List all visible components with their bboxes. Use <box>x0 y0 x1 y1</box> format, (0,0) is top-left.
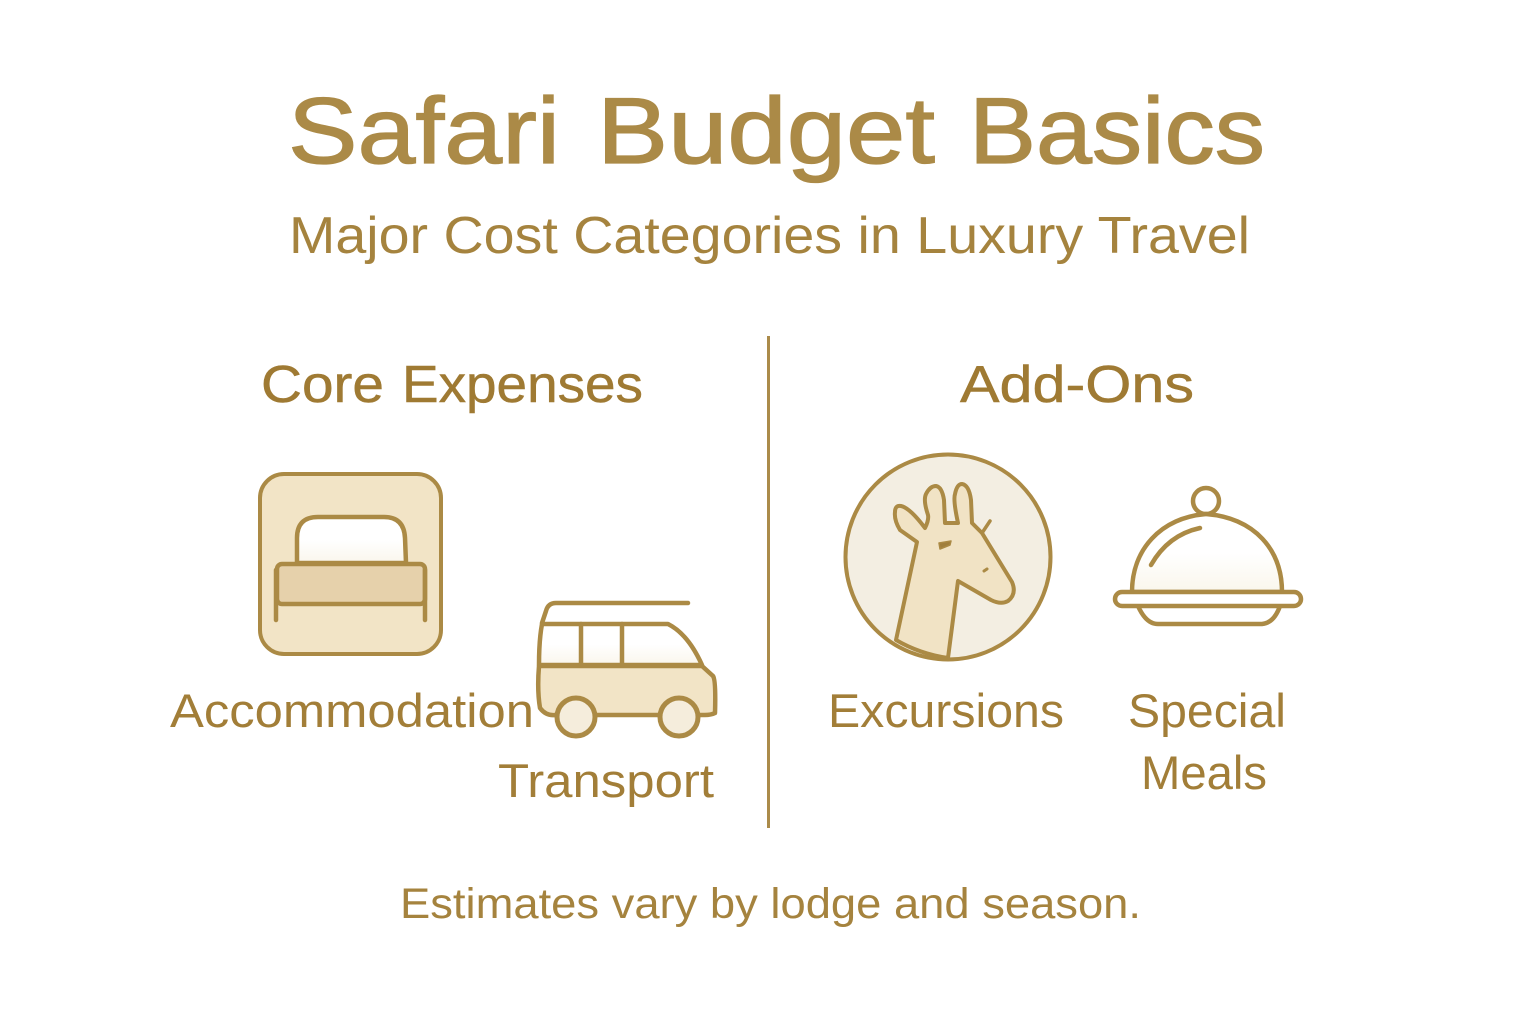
title: Basics <box>969 78 1265 183</box>
label: special meals: Special <box>1128 684 1286 737</box>
giraffe eye <box>939 541 951 549</box>
label: special meals: Meals <box>1141 746 1267 799</box>
icon: bed <box>260 474 441 654</box>
subtitle: Major Cost Categories in Luxury Travel <box>289 207 1250 265</box>
heading: core expenses <box>261 356 643 414</box>
center divider <box>767 336 770 828</box>
footnote: Estimates vary by lodge and season. <box>400 880 1141 928</box>
heading: add-ons: Add-Ons <box>960 356 1194 414</box>
label: accommodation: Accommodation <box>170 684 534 737</box>
giraffe nostril <box>984 569 987 571</box>
label: special meals <box>1128 684 1286 799</box>
icon: giraffe <box>846 454 1050 660</box>
heading: core expenses: Core <box>261 356 384 414</box>
label: transport: Transport <box>498 754 714 807</box>
icon: safari van <box>538 603 715 736</box>
label: excursions: Excursions <box>828 684 1064 737</box>
title: Budget <box>597 78 935 183</box>
heading: core expenses: Expenses <box>402 356 643 414</box>
title: Safari <box>288 78 560 183</box>
icon: meal cloche <box>1115 488 1301 624</box>
title <box>288 78 1265 183</box>
